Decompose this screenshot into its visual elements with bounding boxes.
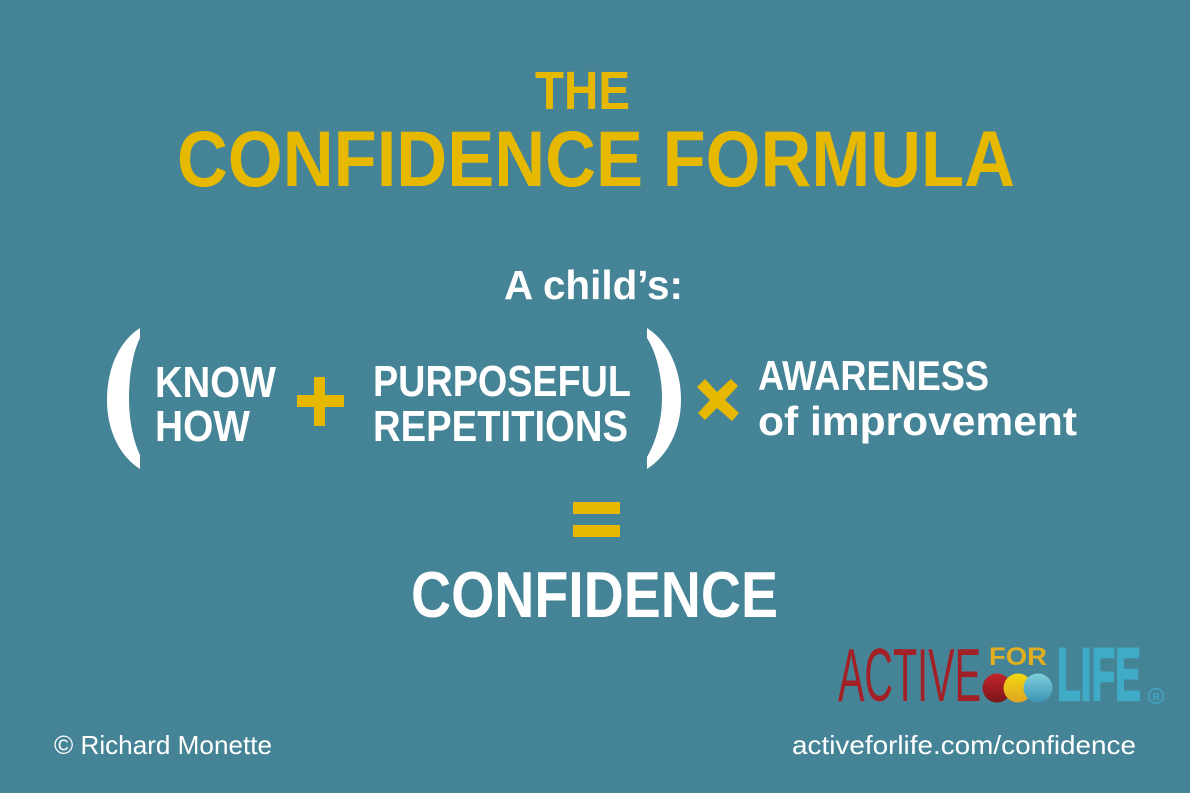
- term: awareness of improvement: of improvement: [758, 398, 1077, 444]
- term: know how: HOW: [155, 402, 250, 451]
- plus sign: [297, 377, 344, 426]
- term: know how: KNOW: [155, 358, 276, 407]
- logo: active for life: R: [1152, 692, 1160, 703]
- credit: © Richard Monette: [54, 730, 272, 760]
- url: activeforlife.com/confidence: [792, 730, 1136, 760]
- title: [177, 61, 1015, 203]
- logo: active for life: FOR: [989, 643, 1047, 671]
- title: CONFIDENCE FORMULA: [177, 114, 1015, 203]
- term: purposeful repetitions: PURPOSEFUL: [373, 357, 631, 406]
- equals sign: [573, 502, 620, 537]
- term: awareness of improvement: [758, 352, 1077, 444]
- term: purposeful repetitions: [373, 357, 631, 451]
- logo: active for life: ACTIVE: [838, 633, 981, 717]
- right bracket: [647, 328, 681, 469]
- term: know how: [155, 358, 276, 451]
- left bracket: [107, 328, 140, 469]
- title: THE: [535, 61, 630, 121]
- result: confidence: CONFIDENCE: [411, 558, 778, 631]
- term: purposeful repetitions: REPETITIONS: [373, 402, 628, 451]
- term: awareness of improvement: AWARENESS: [758, 352, 989, 399]
- formula: [107, 328, 1077, 469]
- subtitle: a child's: A child’s:: [504, 262, 683, 308]
- multiply sign: [697, 379, 739, 421]
